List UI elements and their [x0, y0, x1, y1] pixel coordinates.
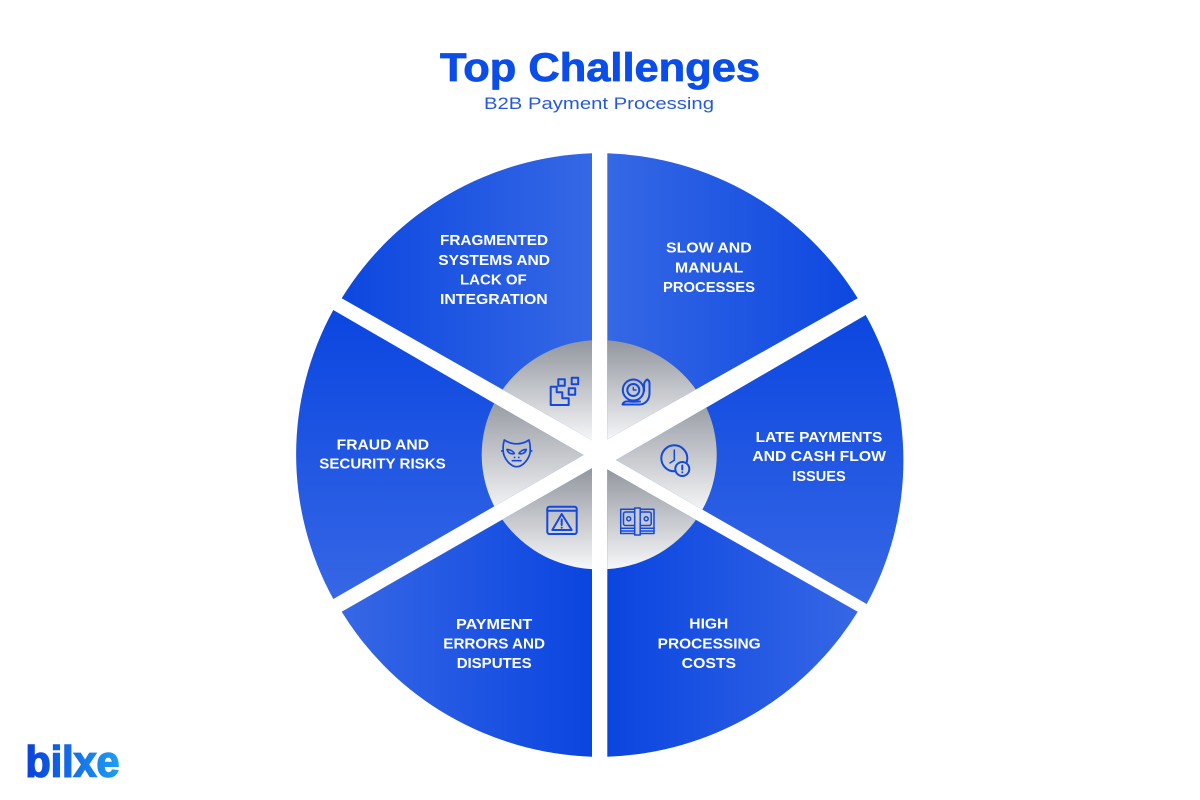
- icon: snail with clock: [622, 380, 650, 404]
- label: high processing costs: [658, 615, 761, 672]
- label: payment errors: DISPUTES: [457, 655, 532, 672]
- infographic: top challenges wheel: [27, 52, 904, 778]
- label: payment errors: PAYMENT: [456, 616, 532, 633]
- panel: late payments and cash flow: [616, 315, 904, 604]
- label: fragmented systems: SYSTEMS AND: [438, 252, 550, 269]
- panel: fraud and security risks: [296, 310, 584, 599]
- label: high processing costs: PROCESSING: [658, 635, 761, 652]
- icon: banknotes: [621, 508, 654, 535]
- panel: high processing costs: [607, 470, 858, 757]
- icon: fragmented blocks: [551, 378, 578, 405]
- label: late payments: [752, 429, 887, 485]
- icon: clock with alert: [661, 445, 689, 476]
- label: fraud and security: SECURITY RISKS: [319, 455, 446, 472]
- label: fragmented systems: FRAGMENTED: [440, 232, 548, 249]
- label: late payments: ISSUES: [792, 468, 846, 485]
- panel: slow and manual processes: [607, 153, 858, 440]
- label: payment errors: [443, 616, 545, 672]
- label: high processing costs: HIGH: [689, 615, 728, 632]
- logo: bilxe: bilxe: [26, 738, 120, 786]
- title: Top Challenges: [440, 46, 760, 90]
- label: late payments: LATE PAYMENTS: [756, 429, 882, 446]
- label: slow and manual: PROCESSES: [663, 279, 755, 296]
- icon: warning window: [547, 507, 577, 534]
- label: payment errors: ERRORS AND: [443, 635, 545, 652]
- label: slow and manual: MANUAL: [675, 259, 743, 276]
- label: fragmented systems: INTEGRATION: [440, 291, 548, 308]
- label: late payments: AND CASH FLOW: [752, 448, 887, 465]
- label: fragmented systems: [438, 232, 550, 308]
- label: high processing costs: COSTS: [682, 655, 736, 672]
- label: fraud and security: FRAUD AND: [337, 436, 429, 453]
- panel: fragmented systems: [342, 153, 592, 440]
- label: fragmented systems: LACK OF: [460, 271, 527, 288]
- panel: payment errors and disputes: [342, 468, 592, 757]
- label: slow and manual: SLOW AND: [666, 240, 752, 257]
- label: fraud and security: [319, 436, 446, 472]
- icon: mask: [502, 440, 532, 467]
- subtitle: B2B Payment Processing: [484, 94, 714, 113]
- label: slow and manual: [663, 240, 755, 296]
